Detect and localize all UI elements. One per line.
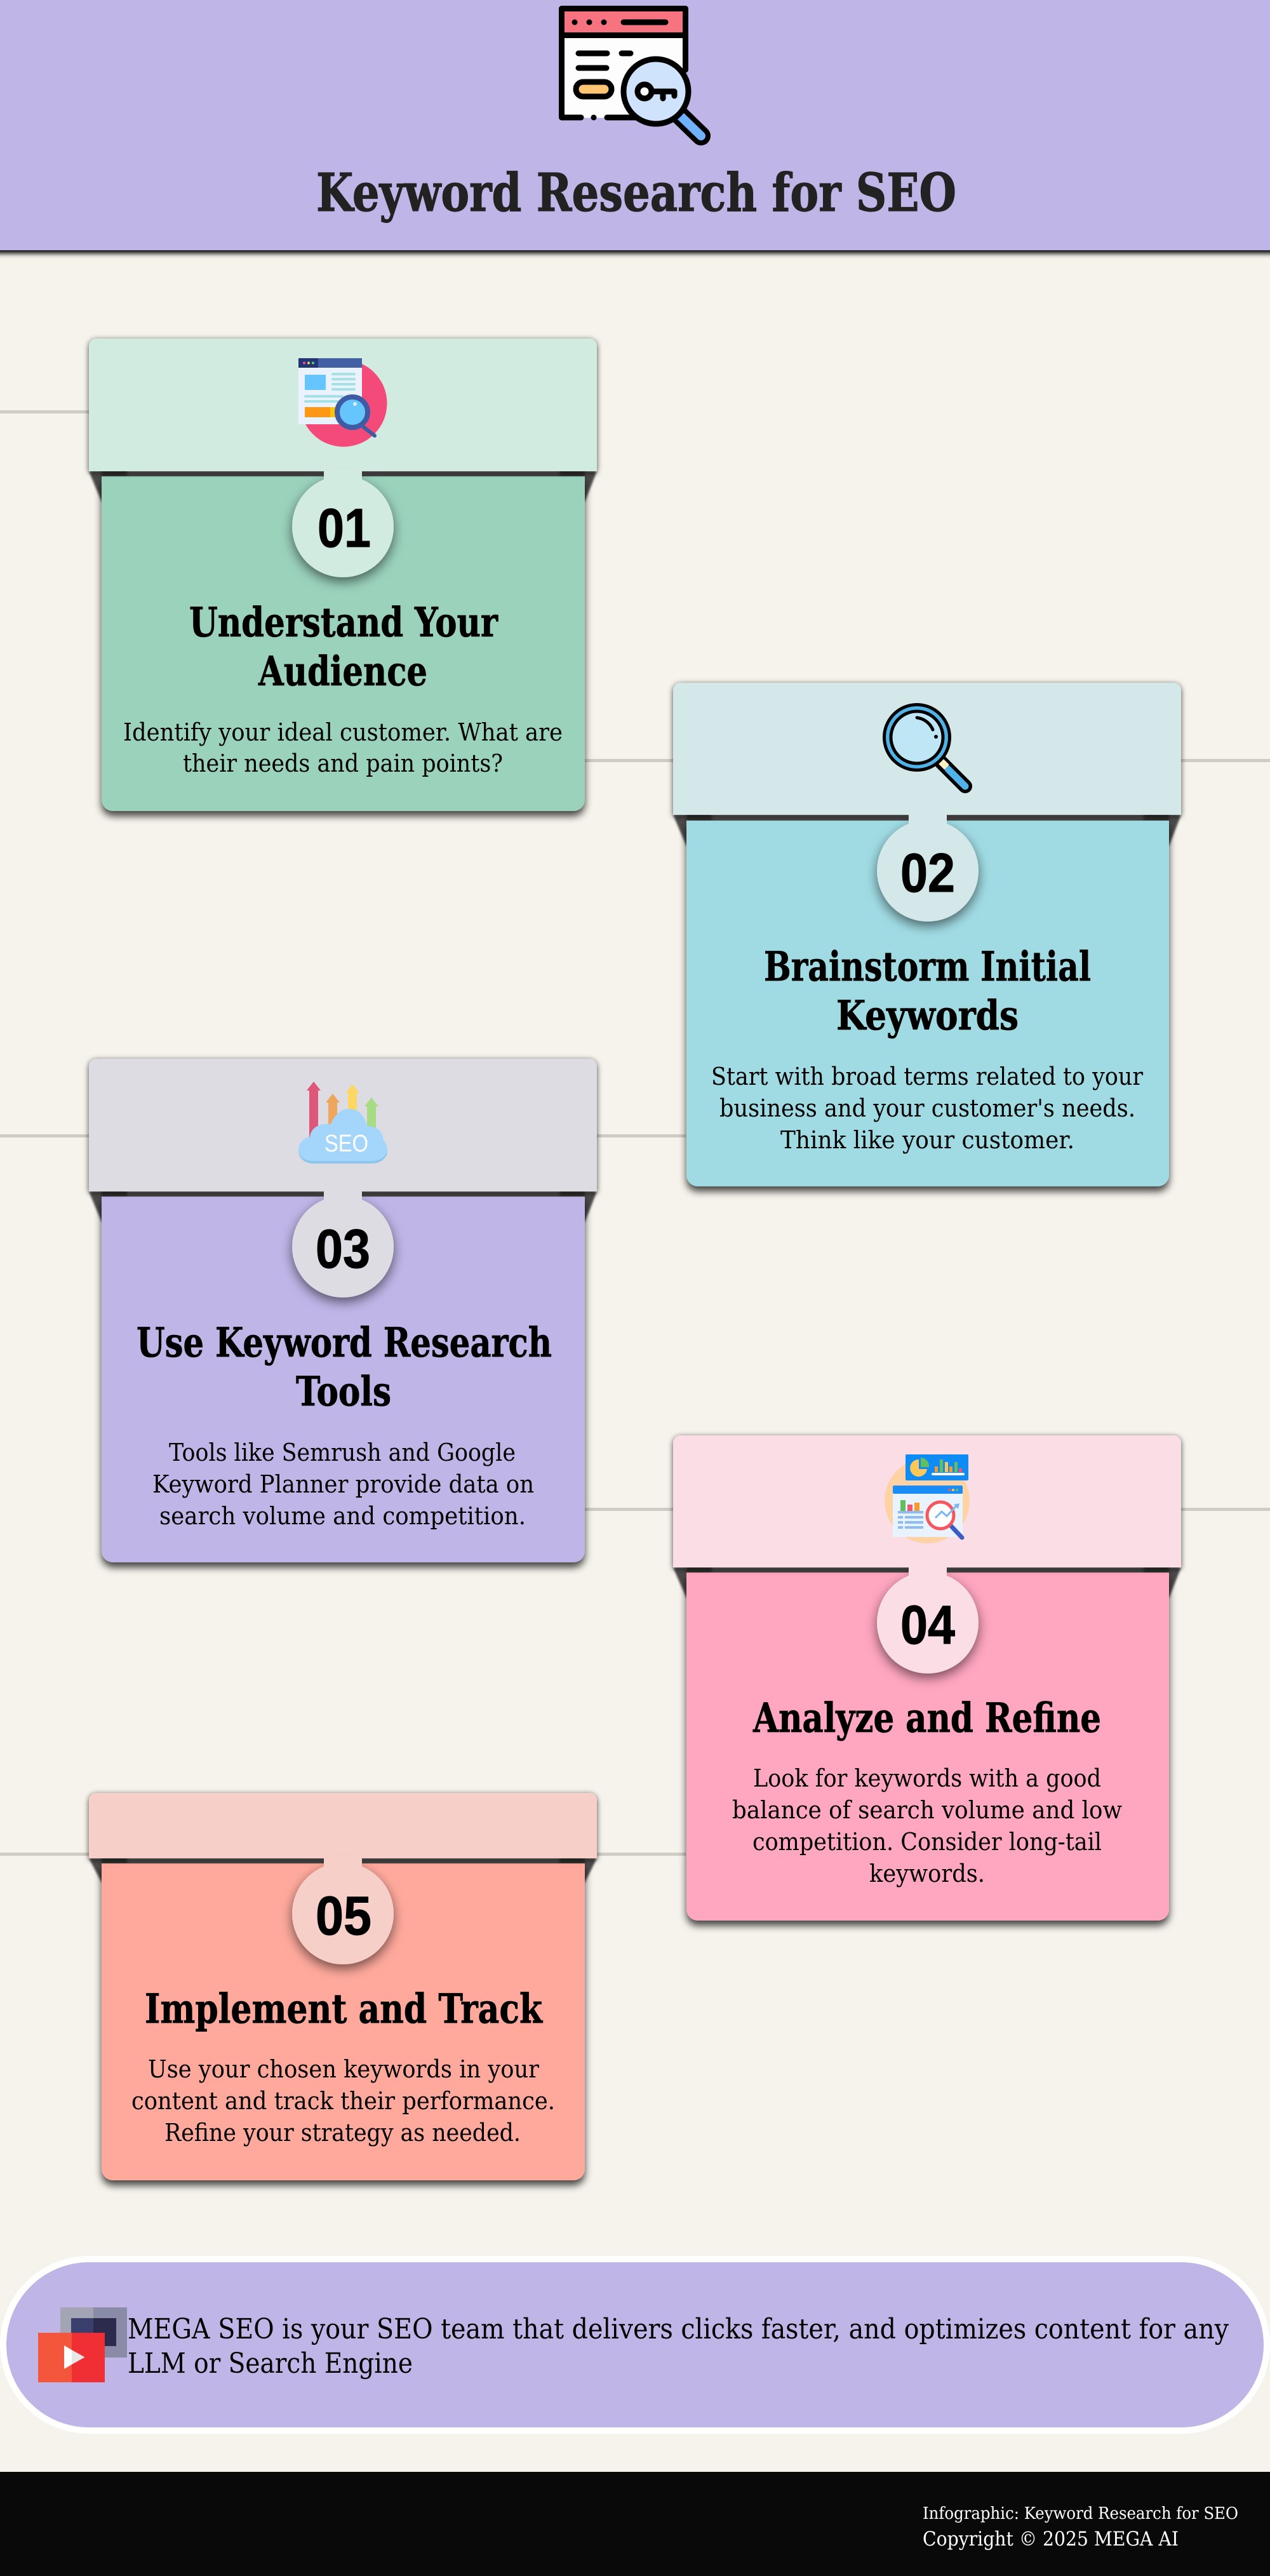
- icon: analytics dashboard: [885, 1454, 970, 1543]
- number badge: 03: [316, 1219, 370, 1280]
- card header: [89, 1793, 597, 1858]
- step description: Tools like Semrush and Google: [169, 1439, 516, 1466]
- step description: [732, 1764, 1122, 1888]
- step heading: [189, 599, 498, 695]
- title: Keyword Research for SEO: [316, 163, 956, 224]
- step description: Think like your customer.: [780, 1126, 1074, 1154]
- panel: step 05: [89, 1793, 597, 2180]
- step description: [123, 718, 563, 777]
- number badge: [292, 469, 394, 577]
- step heading: Tools: [296, 1368, 391, 1416]
- banner text: [128, 2313, 1229, 2380]
- fold shadow: [89, 471, 597, 502]
- step description: [711, 1063, 1144, 1154]
- fold shadow: [89, 1191, 597, 1222]
- fold shadow: [673, 1567, 1181, 1598]
- step description: Keyword Planner provide data on: [152, 1470, 534, 1498]
- card header: [89, 339, 597, 471]
- footer text: Copyright © 2025 MEGA AI: [923, 2528, 1179, 2551]
- footer: [0, 2472, 1270, 2576]
- panel: step 02: [673, 683, 1181, 1186]
- step description: Look for keywords with a good: [753, 1764, 1101, 1792]
- step heading: Audience: [258, 648, 427, 695]
- step description: Refine your strategy as needed.: [164, 2119, 521, 2147]
- step description: [152, 1439, 534, 1530]
- step heading: Keywords: [836, 992, 1019, 1040]
- step description: search volume and competition.: [159, 1502, 526, 1530]
- step heading: Use Keyword Research: [137, 1319, 552, 1367]
- step heading: Brainstorm Initial: [764, 943, 1091, 991]
- step description: keywords.: [869, 1860, 985, 1888]
- number badge: 01: [318, 498, 371, 559]
- fold shadow: [673, 815, 1181, 846]
- step heading: Analyze and Refine: [752, 1694, 1101, 1742]
- step heading: Implement and Track: [145, 1985, 543, 2033]
- step description: Identify your ideal customer. What are: [123, 718, 563, 746]
- number badge: [877, 812, 979, 922]
- step heading: [764, 943, 1091, 1040]
- panel: step 01: [89, 339, 597, 811]
- card body: [686, 821, 1169, 1186]
- step description: balance of search volume and low: [732, 1796, 1122, 1824]
- icon: SEO cloud with arrows: SEO: [324, 1130, 368, 1157]
- panel: step 03: [89, 1059, 597, 1562]
- number badge: [292, 1189, 394, 1298]
- panel: step 04: [673, 1435, 1181, 1921]
- icon: magnifying glass: [884, 705, 965, 786]
- promo banner: [3, 2259, 1267, 2431]
- number badge: [292, 1856, 394, 1964]
- connector lines: [0, 410, 1270, 1856]
- number badge: 04: [900, 1595, 955, 1656]
- icon: web page with magnifier: [298, 358, 387, 447]
- icon: video logo: [38, 2307, 127, 2382]
- step description: content and track their performance.: [131, 2087, 555, 2115]
- icon: keyword browser with magnifier: [561, 9, 701, 136]
- step description: [131, 2055, 555, 2147]
- step heading: Understand Your: [189, 599, 498, 647]
- card body: [686, 1573, 1169, 1921]
- card body: [102, 476, 585, 811]
- header band: [0, 0, 1270, 250]
- card header: [673, 683, 1181, 815]
- step description: Use your chosen keywords in your: [148, 2055, 540, 2083]
- step description: business and your customer's needs.: [719, 1094, 1135, 1122]
- banner text: LLM or Search Engine: [128, 2347, 413, 2380]
- number badge: [877, 1565, 979, 1674]
- icon: SEO cloud with arrows: [298, 1082, 387, 1164]
- number badge: 02: [900, 843, 955, 904]
- card header: [673, 1435, 1181, 1567]
- fold shadow: [89, 1858, 597, 1882]
- step heading: [137, 1319, 552, 1416]
- step description: Start with broad terms related to your: [711, 1063, 1144, 1090]
- card header: [89, 1059, 597, 1191]
- number badge: 05: [316, 1886, 371, 1947]
- footer text: Infographic: Keyword Research for SEO: [923, 2504, 1238, 2523]
- footer text: [923, 2504, 1238, 2551]
- card body: [102, 1197, 585, 1562]
- step description: their needs and pain points?: [183, 749, 503, 777]
- card body: [102, 1863, 585, 2180]
- step description: competition. Consider long-tail: [752, 1828, 1102, 1856]
